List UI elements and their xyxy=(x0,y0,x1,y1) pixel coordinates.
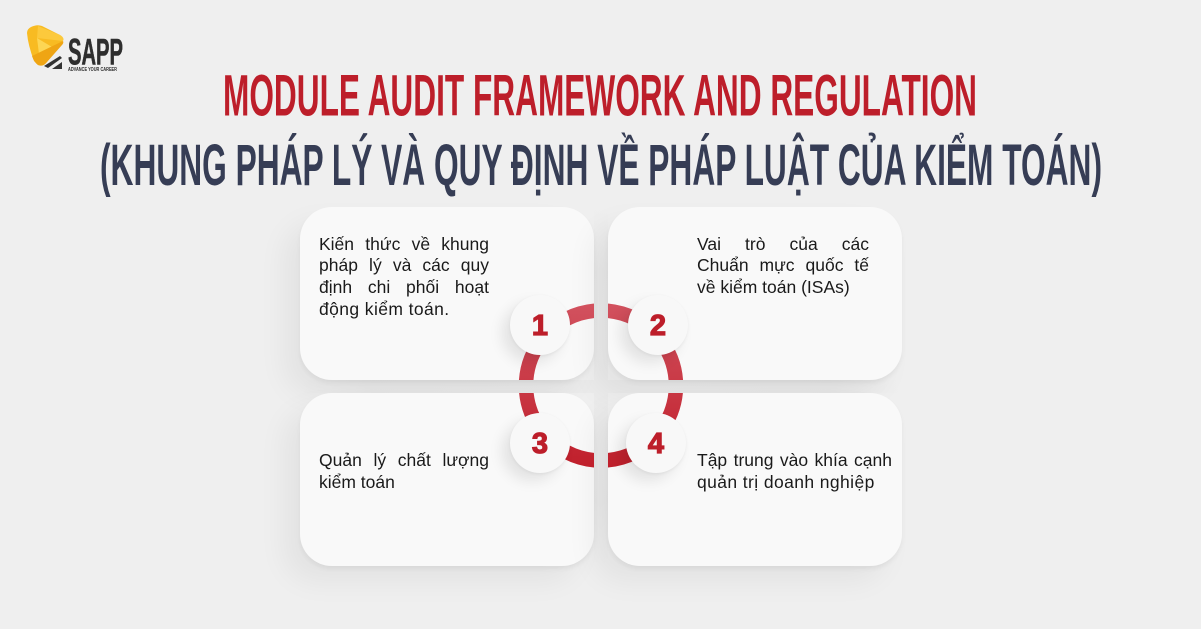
text: card 2: Vai trò của các xyxy=(697,234,869,254)
text: card 2: Chuẩn mực quốc tế xyxy=(697,255,869,275)
number badge 4 xyxy=(626,413,686,473)
text: card 1: động kiểm toán. xyxy=(319,299,450,319)
title xyxy=(100,64,1102,198)
panel: card 3 xyxy=(300,393,594,566)
ring connecting the four cards xyxy=(518,304,684,468)
text: card 3: Quản lý chất lượng xyxy=(319,450,489,470)
panel: card 4 xyxy=(608,393,902,566)
text: card 1: Kiến thức về khung xyxy=(319,234,489,254)
number badge 1 xyxy=(510,295,570,355)
text: card 4 xyxy=(697,450,892,492)
logo: SAPP: ADVANCE YOUR CAREER xyxy=(68,67,117,73)
text: card 1 xyxy=(319,234,489,319)
text: card 2: về kiểm toán (ISAs) xyxy=(697,277,850,297)
number badge 3: 3 xyxy=(532,428,548,460)
number badge 2 xyxy=(628,295,688,355)
number badge 2: 2 xyxy=(650,310,666,342)
text: card 3: kiểm toán xyxy=(319,472,395,492)
text: card 1: pháp lý và các quy xyxy=(319,255,489,275)
logo: SAPP xyxy=(27,25,123,73)
text: card 4: quản trị doanh nghiệp xyxy=(697,472,875,492)
text: card 1: định chi phối hoạt xyxy=(319,277,489,297)
text: card 3 xyxy=(319,450,489,492)
panel: card 1 xyxy=(300,207,594,380)
number badge 4: 4 xyxy=(648,428,664,460)
text: card 2 xyxy=(697,234,869,297)
panel: card 2 xyxy=(608,207,902,380)
number badge 1: 1 xyxy=(532,310,548,342)
number badge 3 xyxy=(510,413,570,473)
text: card 4: Tập trung vào khía cạnh xyxy=(697,450,892,470)
